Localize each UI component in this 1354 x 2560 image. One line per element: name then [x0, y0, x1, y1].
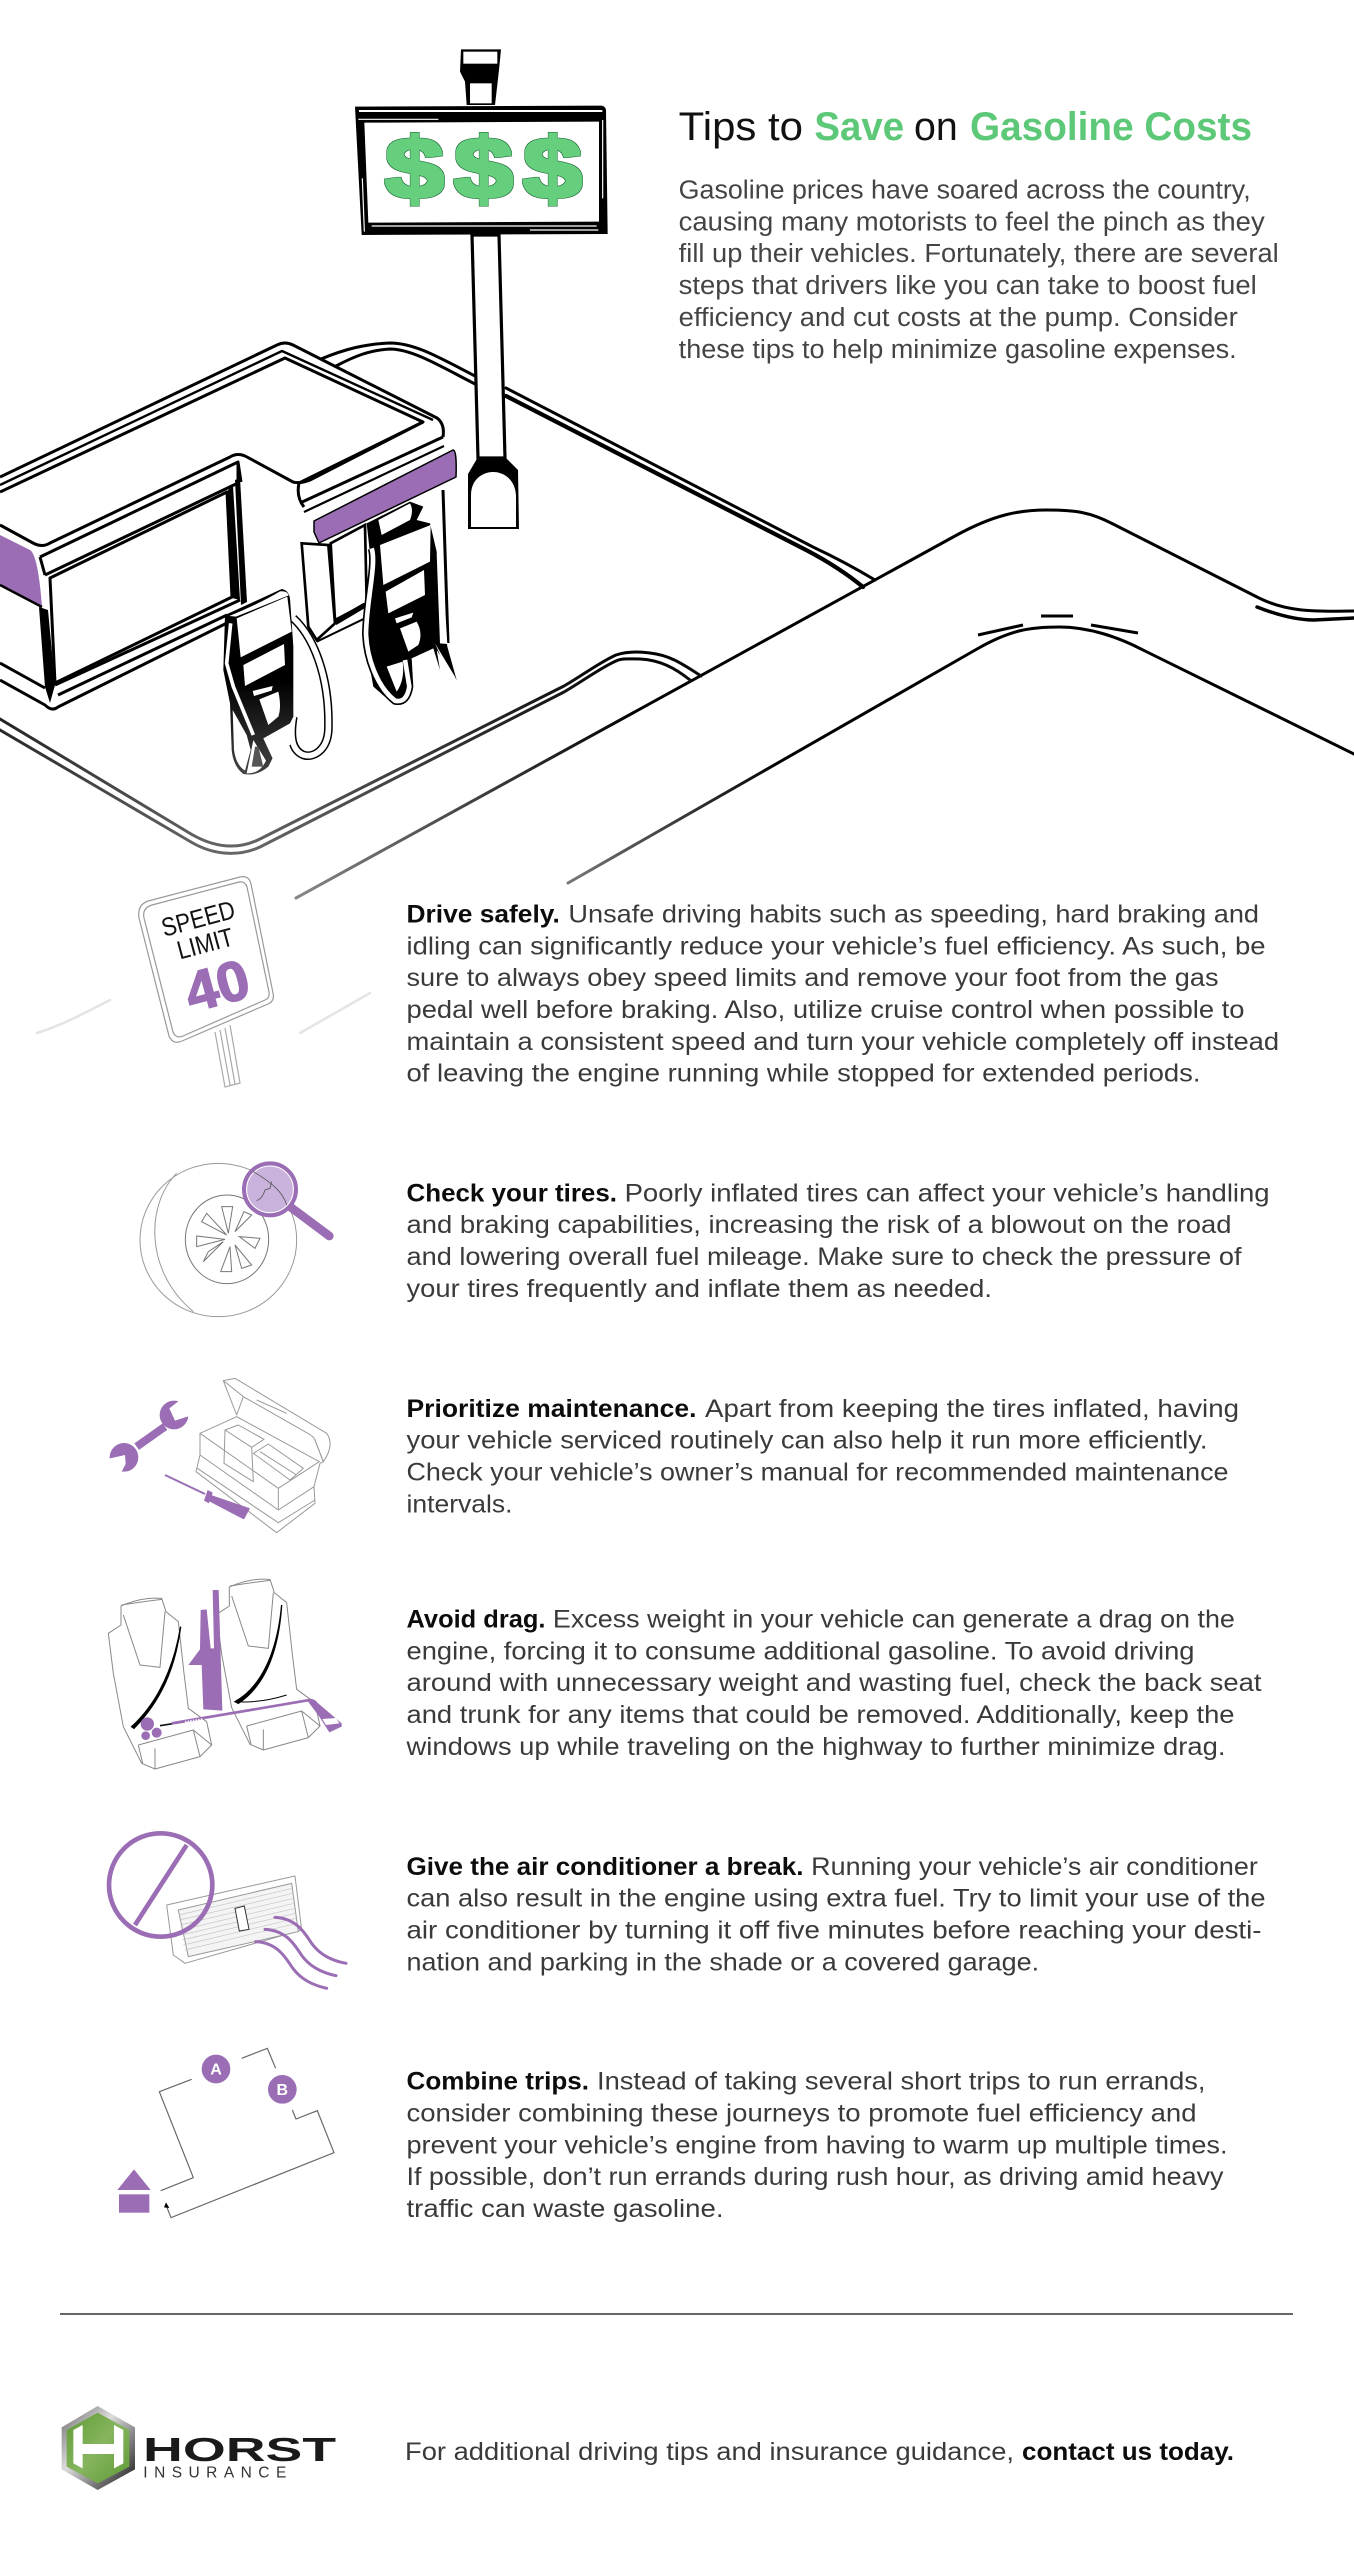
tip: avoid drag: windows up while traveling on the highway to further minimize drag. — [405, 1733, 1225, 1761]
divider — [60, 2313, 1293, 2315]
icon: rear gas pump — [366, 502, 457, 702]
tip: check your tires: your tires frequently and inflate them as needed. — [406, 1275, 992, 1303]
tip: drive safely: Drive safely. — [406, 900, 560, 928]
tip: combine trips: consider combining these journeys to promote fuel efficiency and — [406, 2099, 1196, 2127]
icon: price sign with dollar signs: $ — [454, 121, 514, 217]
tip: drive safely: sure to always obey speed limits and remove your foot from the gas — [406, 964, 1218, 992]
icon: price sign with dollar signs: $ — [522, 121, 582, 217]
tip: drive safely — [406, 900, 1279, 1088]
logo: Horst Insurance: INSURANCE — [143, 2464, 286, 2481]
intro paragraph: fill up their vehicles. Fortunately, there are several — [679, 240, 1279, 268]
icon: speed limit sign: SPEED — [158, 894, 238, 943]
title: Tips to — [679, 105, 803, 149]
tip: check your tires: and lowering overall fuel mileage. Make sure to check the pressure of — [406, 1243, 1242, 1271]
icon: tire with magnifying glass — [140, 1163, 329, 1317]
tip: avoid drag: Avoid drag. — [406, 1606, 546, 1634]
intro paragraph: Gasoline prices have soared across the country, — [679, 176, 1251, 204]
tip: prioritize maintenance: intervals. — [406, 1490, 512, 1518]
hero illustration: roads — [0, 343, 1354, 1033]
title: Gasoline Costs — [970, 105, 1252, 149]
tip: drive safely: Unsafe driving habits such as speeding, hard braking and — [568, 900, 1259, 928]
tip: drive safely: idling can significantly reduce your vehicle’s fuel efficiency. As such, be — [406, 932, 1266, 960]
icon: trip route from home to stops A and B — [117, 2048, 334, 2218]
intro paragraph: causing many motorists to feel the pinch as they — [679, 208, 1265, 236]
tip: check your tires: and braking capabilities, increasing the risk of a blowout on the road — [406, 1211, 1232, 1239]
icon: trip route from home to stops A and B: B — [277, 2082, 288, 2099]
tip: drive safely: pedal well before braking. Also, utilize cruise control when possible to — [406, 996, 1244, 1024]
title — [679, 105, 1252, 149]
intro paragraph: steps that drivers like you can take to boost fuel — [679, 272, 1257, 300]
tip: avoid drag: engine, forcing it to consume additional gasoline. To avoid driving — [406, 1637, 1194, 1665]
tip: prioritize maintenance — [406, 1395, 1239, 1518]
tip: give the air conditioner a break: Running your vehicle’s air conditioner — [811, 1853, 1258, 1881]
icon: price sign with dollar signs: $ — [384, 121, 444, 217]
tip: check your tires — [406, 1179, 1270, 1303]
tip: check your tires: Check your tires. — [406, 1179, 617, 1207]
intro paragraph: efficiency and cut costs at the pump. Consider — [679, 304, 1238, 332]
footer call to action — [405, 2438, 1234, 2466]
tip: give the air conditioner a break — [406, 1853, 1266, 1976]
tip: combine trips: Instead of taking several short trips to run errands, — [597, 2068, 1206, 2096]
tip: combine trips: prevent your vehicle’s engine from having to warm up multiple times. — [406, 2131, 1228, 2159]
illustration: gas station canopy — [0, 343, 456, 712]
icon: price sign with dollar signs — [355, 49, 608, 529]
icon: toolbox with wrench and screwdriver — [104, 1378, 330, 1533]
logo: Horst Insurance: HORST — [143, 2431, 336, 2468]
icon: car seats with golf gear — [108, 1579, 342, 1769]
footer call to action: contact us today. — [1022, 2438, 1234, 2466]
tip: give the air conditioner a break: Give the air conditioner a break. — [406, 1853, 804, 1881]
tip: prioritize maintenance: Apart from keeping the tires inflated, having — [705, 1395, 1239, 1423]
logo: Horst Insurance — [62, 2406, 336, 2490]
intro paragraph — [679, 176, 1279, 364]
tip: avoid drag — [405, 1606, 1262, 1761]
icon: gas pump kiosk panels — [302, 525, 367, 642]
tip: combine trips — [406, 2068, 1228, 2223]
icon: air conditioner with prohibition symbol — [109, 1833, 346, 1988]
icon: trip route from home to stops A and B: A — [210, 2062, 222, 2079]
icon: speed limit sign: LIMIT — [174, 922, 237, 965]
tip: prioritize maintenance: Check your vehicle’s owner’s manual for recommended maintenance — [406, 1458, 1228, 1486]
tip: give the air conditioner a break: can also result in the engine using extra fuel. Try to limit your use of the — [406, 1885, 1266, 1913]
tip: give the air conditioner a break: nation and parking in the shade or a covered garage. — [406, 1948, 1039, 1976]
tip: prioritize maintenance: your vehicle serviced routinely can also help it run more efficiently. — [406, 1427, 1208, 1455]
tip: avoid drag: around with unnecessary weight and wasting fuel, check the back seat — [406, 1669, 1262, 1697]
tip: combine trips: traffic can waste gasoline. — [406, 2195, 724, 2223]
title: Save — [814, 105, 904, 149]
tip: avoid drag: and trunk for any items that could be removed. Additionally, keep the — [406, 1701, 1234, 1729]
footer call to action: For additional driving tips and insurance guidance, — [405, 2438, 1014, 2466]
intro paragraph: these tips to help minimize gasoline expenses. — [679, 336, 1237, 364]
title: on — [914, 105, 958, 149]
tip: combine trips: Combine trips. — [406, 2068, 589, 2096]
tip: avoid drag: Excess weight in your vehicle can generate a drag on the — [553, 1606, 1235, 1634]
icon: front gas pump — [223, 589, 328, 775]
tip: drive safely: maintain a consistent speed and turn your vehicle completely off instead — [406, 1028, 1279, 1056]
tip: combine trips: If possible, don’t run errands during rush hour, as driving amid heavy — [406, 2163, 1224, 2191]
tip: check your tires: Poorly inflated tires can affect your vehicle’s handling — [625, 1179, 1270, 1207]
tip: give the air conditioner a break: air conditioner by turning it off five minutes before reaching your desti- — [406, 1917, 1262, 1945]
icon: speed limit sign: 40 — [178, 947, 256, 1024]
tip: drive safely: of leaving the engine running while stopped for extended periods. — [406, 1060, 1200, 1088]
icon: speed limit sign — [139, 877, 273, 1087]
tip: prioritize maintenance: Prioritize maintenance. — [406, 1395, 696, 1423]
